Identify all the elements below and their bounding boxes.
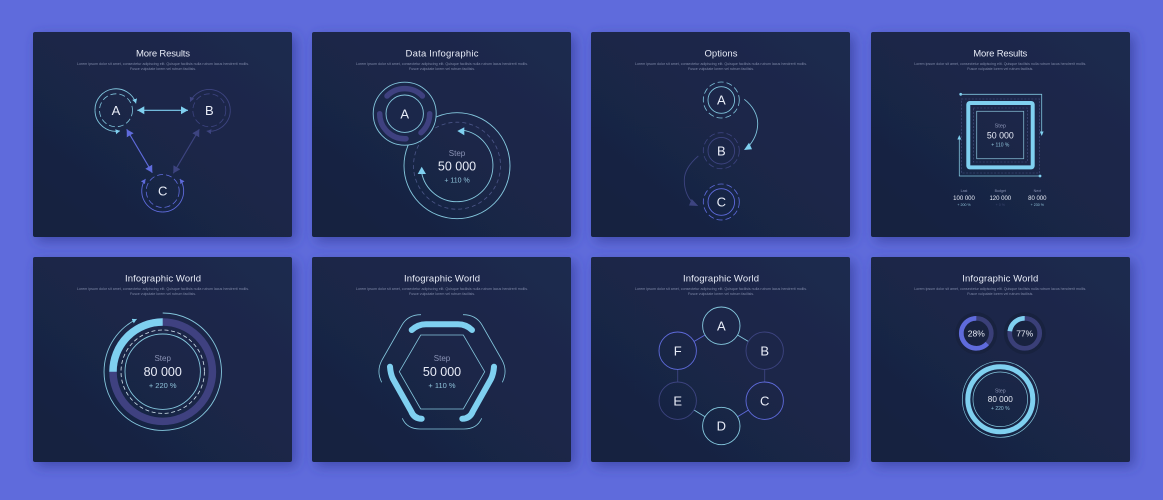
node C [746, 382, 783, 419]
description text: Fusce vulputate lorem vel rutrum facilisis. [688, 292, 754, 296]
node F: F [674, 343, 682, 358]
description text [635, 287, 807, 296]
node B [190, 89, 230, 131]
stat: Last: Last [961, 189, 967, 193]
arrow: B to C [173, 129, 199, 173]
heading: More Results: More Results [973, 48, 1028, 60]
panel: circular progress [33, 257, 292, 462]
donut: 28%: 28% [968, 328, 985, 338]
node B: B [760, 343, 769, 358]
panel: percent donuts [871, 257, 1130, 462]
arrow: B to C [684, 156, 698, 206]
heading: Options: Options [704, 48, 738, 60]
node C [142, 174, 184, 212]
node A [703, 307, 740, 344]
node A: A [112, 103, 121, 118]
description text: Fusce vulputate lorem vel rutrum facilisis. [967, 67, 1033, 71]
stat: Next: Next [1034, 189, 1041, 193]
panel: square results [871, 32, 1130, 237]
description text: Fusce vulputate lorem vel rutrum facilisis. [409, 292, 475, 296]
step value: Step [995, 388, 1006, 394]
donut: 77% [1004, 312, 1046, 354]
description text: Fusce vulputate lorem vel rutrum facilisis. [688, 67, 754, 71]
step ring [962, 361, 1038, 437]
step value [423, 354, 461, 390]
step value: Step [154, 354, 171, 363]
node A: A [717, 318, 726, 333]
option B: B [717, 143, 726, 158]
description text: Lorem ipsum dolor sit amet, consectetur adipiscing elit. Quisque facilisis nulla rutrum lacus hendrerit mollis. [77, 62, 249, 66]
description text: Fusce vulputate lorem vel rutrum facilisis. [130, 67, 196, 71]
option C [703, 184, 739, 220]
description text: Lorem ipsum dolor sit amet, consectetur adipiscing elit. Quisque facilisis nulla rutrum lacus hendrerit mollis. [914, 287, 1086, 291]
step value: + 220 % [149, 381, 177, 390]
step value: 50 000 [987, 130, 1014, 140]
hexagon frame [379, 315, 505, 429]
description text [914, 287, 1086, 296]
description text: Lorem ipsum dolor sit amet, consectetur adipiscing elit. Quisque facilisis nulla rutrum lacus hendrerit mollis. [635, 62, 807, 66]
description text: Lorem ipsum dolor sit amet, consectetur adipiscing elit. Quisque facilisis nulla rutrum lacus hendrerit mollis. [914, 62, 1086, 66]
description text [914, 62, 1086, 71]
node F [659, 332, 696, 369]
option C: C [717, 195, 726, 210]
stat: Next: 80 000 [1028, 196, 1047, 202]
donut: 28% [955, 312, 997, 354]
heading: Infographic World: Infographic World [125, 274, 201, 284]
arrow: bottom left [957, 135, 1041, 177]
option B [703, 133, 739, 169]
heading: Infographic World: Infographic World [404, 274, 480, 284]
node C: C [760, 393, 769, 408]
arrow: A to B [744, 99, 758, 150]
step value [988, 388, 1013, 412]
node B: B [205, 103, 214, 118]
connectors [678, 335, 765, 417]
description text [356, 62, 528, 71]
node E [659, 382, 696, 419]
node E: E [673, 393, 682, 408]
progress ring [104, 313, 221, 430]
arrow: A to B [137, 109, 188, 111]
step value: Step [995, 124, 1006, 130]
step value: + 110 % [444, 178, 470, 184]
step value: 50 000 [438, 160, 476, 174]
panel: options [591, 32, 850, 237]
heading: Infographic World: Infographic World [683, 274, 759, 284]
node A [95, 89, 136, 131]
step value: Step [434, 354, 451, 363]
node D [703, 407, 740, 445]
description text: Fusce vulputate lorem vel rutrum facilisis. [130, 292, 196, 296]
description text: Lorem ipsum dolor sit amet, consectetur adipiscing elit. Quisque facilisis nulla rutrum lacus hendrerit mollis. [356, 62, 528, 66]
stat: Budget: Budget [995, 189, 1006, 193]
node A ring: A [400, 106, 409, 121]
step value: + 110 % [991, 142, 1010, 148]
stat: Next: + 230 % [1031, 203, 1045, 207]
description text: Lorem ipsum dolor sit amet, consectetur adipiscing elit. Quisque facilisis nulla rutrum lacus hendrerit mollis. [635, 287, 807, 291]
stat: Last: + 200 % [957, 203, 971, 207]
option A [703, 82, 739, 118]
arrow: top right [959, 93, 1044, 136]
panel: hexagon [312, 257, 571, 462]
description text: Lorem ipsum dolor sit amet, consectetur adipiscing elit. Quisque facilisis nulla rutrum lacus hendrerit mollis. [356, 287, 528, 291]
node D: D [717, 419, 726, 434]
donut: 77%: 77% [1016, 328, 1034, 338]
stat: Next [1028, 189, 1047, 207]
node B [746, 332, 783, 369]
description text [356, 287, 528, 296]
panel: six node cycle [591, 257, 850, 462]
description text [77, 287, 249, 296]
description text: Fusce vulputate lorem vel rutrum facilisis. [409, 67, 475, 71]
description text [635, 62, 807, 71]
option A: A [717, 93, 726, 108]
step value: 80 000 [144, 365, 182, 379]
step value: 50 000 [423, 365, 461, 379]
stat: Last [953, 189, 976, 207]
panel: triangle cycle A B C [33, 32, 292, 237]
step value: + 220 % [991, 406, 1010, 412]
node A ring [373, 82, 436, 145]
arrow: A to C [127, 129, 152, 173]
description text [77, 62, 249, 71]
step value [144, 354, 182, 390]
step value: 80 000 [988, 395, 1013, 404]
heading: More Results: More Results [136, 48, 190, 60]
panel: data infographic rings [312, 32, 571, 237]
large step ring [404, 113, 510, 219]
stat: Budget: + 0 % [996, 203, 1006, 207]
description text: Fusce vulputate lorem vel rutrum facilisis. [967, 292, 1033, 296]
stat: Last: 100 000 [953, 196, 976, 202]
step value: Step [449, 149, 466, 158]
nested squares [961, 99, 1040, 173]
stat: Budget: 120 000 [989, 196, 1012, 202]
stat: Budget [989, 189, 1012, 207]
heading: Data Infographic: Data Infographic [406, 48, 479, 60]
description text: Lorem ipsum dolor sit amet, consectetur adipiscing elit. Quisque facilisis nulla rutrum lacus hendrerit mollis. [77, 287, 249, 291]
step value: + 110 % [428, 381, 456, 390]
heading: Infographic World: Infographic World [962, 274, 1038, 284]
node C: C [158, 184, 167, 199]
step value [438, 149, 476, 184]
step value [987, 124, 1014, 148]
